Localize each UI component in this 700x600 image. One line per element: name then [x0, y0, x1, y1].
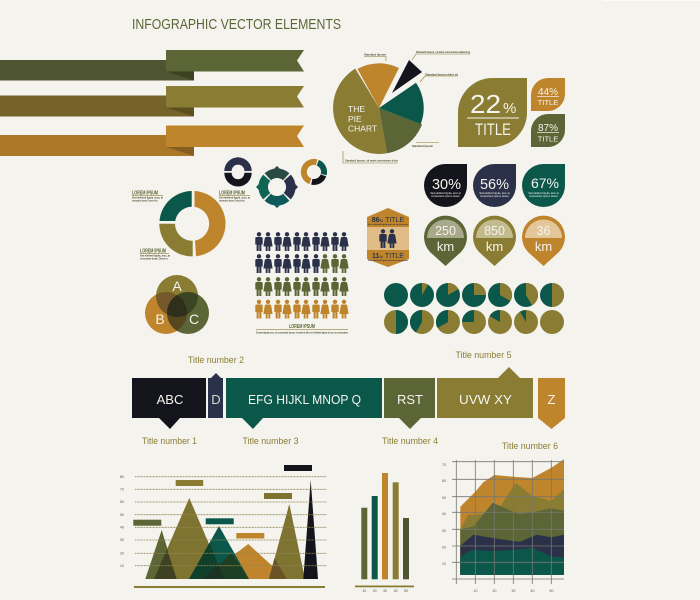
axis labels: 60 [442, 479, 446, 483]
y axis labels: 20 [120, 552, 124, 556]
small leaf: 44% [531, 78, 565, 111]
timeline segment: EFG: EFG HIJKL MNOP Q [248, 392, 361, 407]
timeline segment: EFG [226, 378, 382, 429]
ribbon: gold [0, 126, 304, 156]
donut label right: Sed eleifend ligula, arcu, at [219, 196, 250, 200]
timeline segment: Z [538, 378, 565, 429]
donut label right: LOREM IPSUM [219, 190, 245, 196]
timeline segment: Z: Z [548, 392, 556, 407]
hexagon badge: Sed eleifend ligula arcu at consectetur [368, 259, 408, 262]
area: green [460, 503, 564, 575]
drop: 67%: Sed eleifend ligula, arcu at [528, 191, 559, 195]
axis labels: 40 [531, 589, 534, 593]
venn diagram: C [189, 311, 199, 327]
small leaf: 87%: 87% [538, 123, 558, 134]
grid [452, 460, 564, 584]
timeline segment: RST [384, 378, 435, 429]
pictogram caption: Sit amet ligula arcu, sit consectetur ipsum, sit amet ut felis sed eleifend ligula sit arcu at consectetur [256, 330, 349, 334]
timeline titles: Title number 3 [242, 436, 298, 446]
axis labels [442, 463, 553, 593]
bar chart: 10 [362, 589, 366, 593]
pin: 850 km [473, 216, 516, 266]
drop: 56%: consectetur ipsum donec [480, 194, 510, 198]
area chart [442, 459, 564, 593]
timeline segment: RST: RST [397, 392, 423, 407]
y axis labels: 80 [120, 475, 124, 479]
timeline segment: ABC: ABC [157, 392, 183, 407]
area: olive [460, 483, 564, 575]
drop: 30%: consectetur ipsum donec [431, 194, 461, 198]
timeline segment: D [208, 373, 223, 418]
axis labels: 10 [474, 589, 477, 593]
big leaf: 22% [458, 78, 527, 147]
y axis labels: 40 [120, 526, 124, 530]
timeline segment: D: D [211, 392, 221, 407]
timeline titles: Title number 4 [382, 436, 438, 446]
pie chart: Standard lipsum, sit amet consectetur dolor [345, 158, 399, 162]
hexagon badge: Sed eleifend ligula arcu at consectetur [368, 223, 408, 226]
drop: 30% [424, 164, 467, 207]
pie chart [333, 50, 470, 163]
hexagon badge [367, 208, 409, 267]
pictogram: people [255, 232, 349, 318]
bar chart: 40 [394, 589, 398, 593]
axis labels: 50 [550, 589, 553, 593]
donut label bottom [140, 248, 170, 260]
axis labels: 10 [442, 562, 446, 566]
pie callouts [343, 54, 470, 163]
small leaf: 44%: 44% [538, 87, 558, 98]
timeline titles: Title number 5 [456, 350, 512, 360]
timeline titles: Title number 6 [502, 441, 558, 451]
y axis labels [120, 475, 124, 568]
drop: 30%: 30% [432, 176, 461, 193]
donut label left: LOREM IPSUM [132, 190, 158, 196]
axis labels: 50 [442, 496, 446, 500]
donut label right [219, 190, 250, 202]
timeline titles: Title number 2 [188, 355, 244, 365]
small pies row 1 [384, 283, 564, 307]
big leaf: 22%: TITLE [475, 121, 511, 139]
small leaf: 44%: TITLE [538, 98, 558, 107]
grid lines [135, 477, 327, 566]
axis labels: 70 [442, 463, 446, 467]
ring: two segments [224, 157, 252, 186]
title: INFOGRAPHIC VECTOR ELEMENTS [132, 16, 341, 33]
donut label left: Sed eleifend ligula, arcu, at [132, 196, 163, 200]
venn diagram: B [155, 311, 165, 327]
drop: 67%: 67% [531, 175, 559, 191]
bar chart: 30 [383, 589, 387, 593]
hexagon badge: 86% TITLE [372, 217, 405, 224]
donut label bottom: consectetur ipsum. Donec et. [140, 256, 168, 260]
y axis labels: 30 [120, 538, 124, 542]
y axis labels: 50 [120, 513, 124, 517]
drop: 67%: consectetur ipsum donec [529, 194, 559, 198]
donut label bottom: Sed eleifend ligula, arcu, at [140, 254, 170, 258]
pie chart: Standard lipsum [364, 52, 387, 56]
pin: 850 km: 850 [484, 224, 505, 238]
timeline segment: ABC [132, 378, 206, 429]
venn diagram: A [172, 278, 182, 294]
pin: 36 km: km [535, 239, 552, 254]
triangles [145, 480, 318, 579]
small leaf: 87%: TITLE [538, 134, 558, 144]
donut label bottom: LOREM IPSUM [140, 248, 166, 254]
pin: 36 km [522, 216, 565, 266]
ribbon: olive [0, 86, 304, 116]
bar chart: 20 [373, 589, 377, 593]
hexagon badge: 11% TITLE [372, 253, 404, 260]
venn diagram [145, 275, 209, 334]
baseline [134, 586, 325, 588]
pie chart: PIE [348, 114, 362, 124]
axis labels: 20 [442, 546, 446, 550]
pie chart: CHART [348, 124, 377, 134]
drop: 67% [522, 164, 565, 207]
big leaf: 22%: % [503, 100, 516, 117]
y axis labels: 10 [120, 564, 124, 568]
pie chart: THE [348, 104, 365, 114]
donut label left: consectetur ipsum. Donec et leo. [132, 198, 158, 202]
pie chart: Standard lipsum, sit amet consectetur adipiscing [416, 50, 470, 54]
axis labels: 40 [442, 512, 446, 516]
label bars [133, 465, 312, 538]
drop: 56% [473, 164, 516, 207]
pictogram caption [256, 324, 349, 334]
small leaf: 87% [531, 114, 565, 147]
timeline titles [142, 350, 558, 451]
y axis labels: 70 [120, 488, 124, 492]
pie chart: Standard lipsum [412, 144, 433, 148]
ring: four segments [256, 166, 298, 208]
axis labels: 20 [493, 589, 496, 593]
timeline segment: UVW: UVW XY [459, 392, 512, 407]
y axis labels: 60 [120, 500, 124, 504]
area: navy [460, 535, 564, 575]
triangle chart [120, 465, 327, 588]
axis labels: 30 [442, 529, 446, 533]
drop: 56%: Sed eleifend ligula, arcu at [479, 191, 510, 195]
donut chart [159, 191, 226, 256]
pictogram caption: LOREM IPSUM [289, 324, 315, 330]
drop: 56%: 56% [480, 176, 509, 193]
pin: 250 km: 250 [435, 224, 456, 238]
axis labels: 30 [512, 589, 515, 593]
ring: three segments [304, 162, 324, 182]
pin: 250 km: km [437, 239, 454, 254]
drop: 30%: Sed eleifend ligula, arcu at [430, 191, 461, 195]
pin: 250 km [424, 216, 467, 266]
donut label left [132, 190, 163, 202]
area: teal [460, 548, 564, 575]
big leaf: 22%: 22 [470, 89, 501, 119]
pin: 36 km: 36 [537, 224, 550, 238]
bar chart [355, 473, 414, 593]
donut label right: consectetur ipsum. Donec et leo. [219, 198, 245, 202]
timeline titles: Title number 1 [142, 436, 197, 446]
pie chart: Standard lipsum dolor sit [425, 72, 458, 76]
ribbon: green [0, 50, 304, 80]
bar chart: 50 [404, 589, 408, 593]
area: gold [460, 459, 564, 575]
pin: 850 km: km [486, 239, 503, 254]
small pies row 2 [384, 310, 564, 334]
timeline segment: UVW [437, 367, 533, 418]
